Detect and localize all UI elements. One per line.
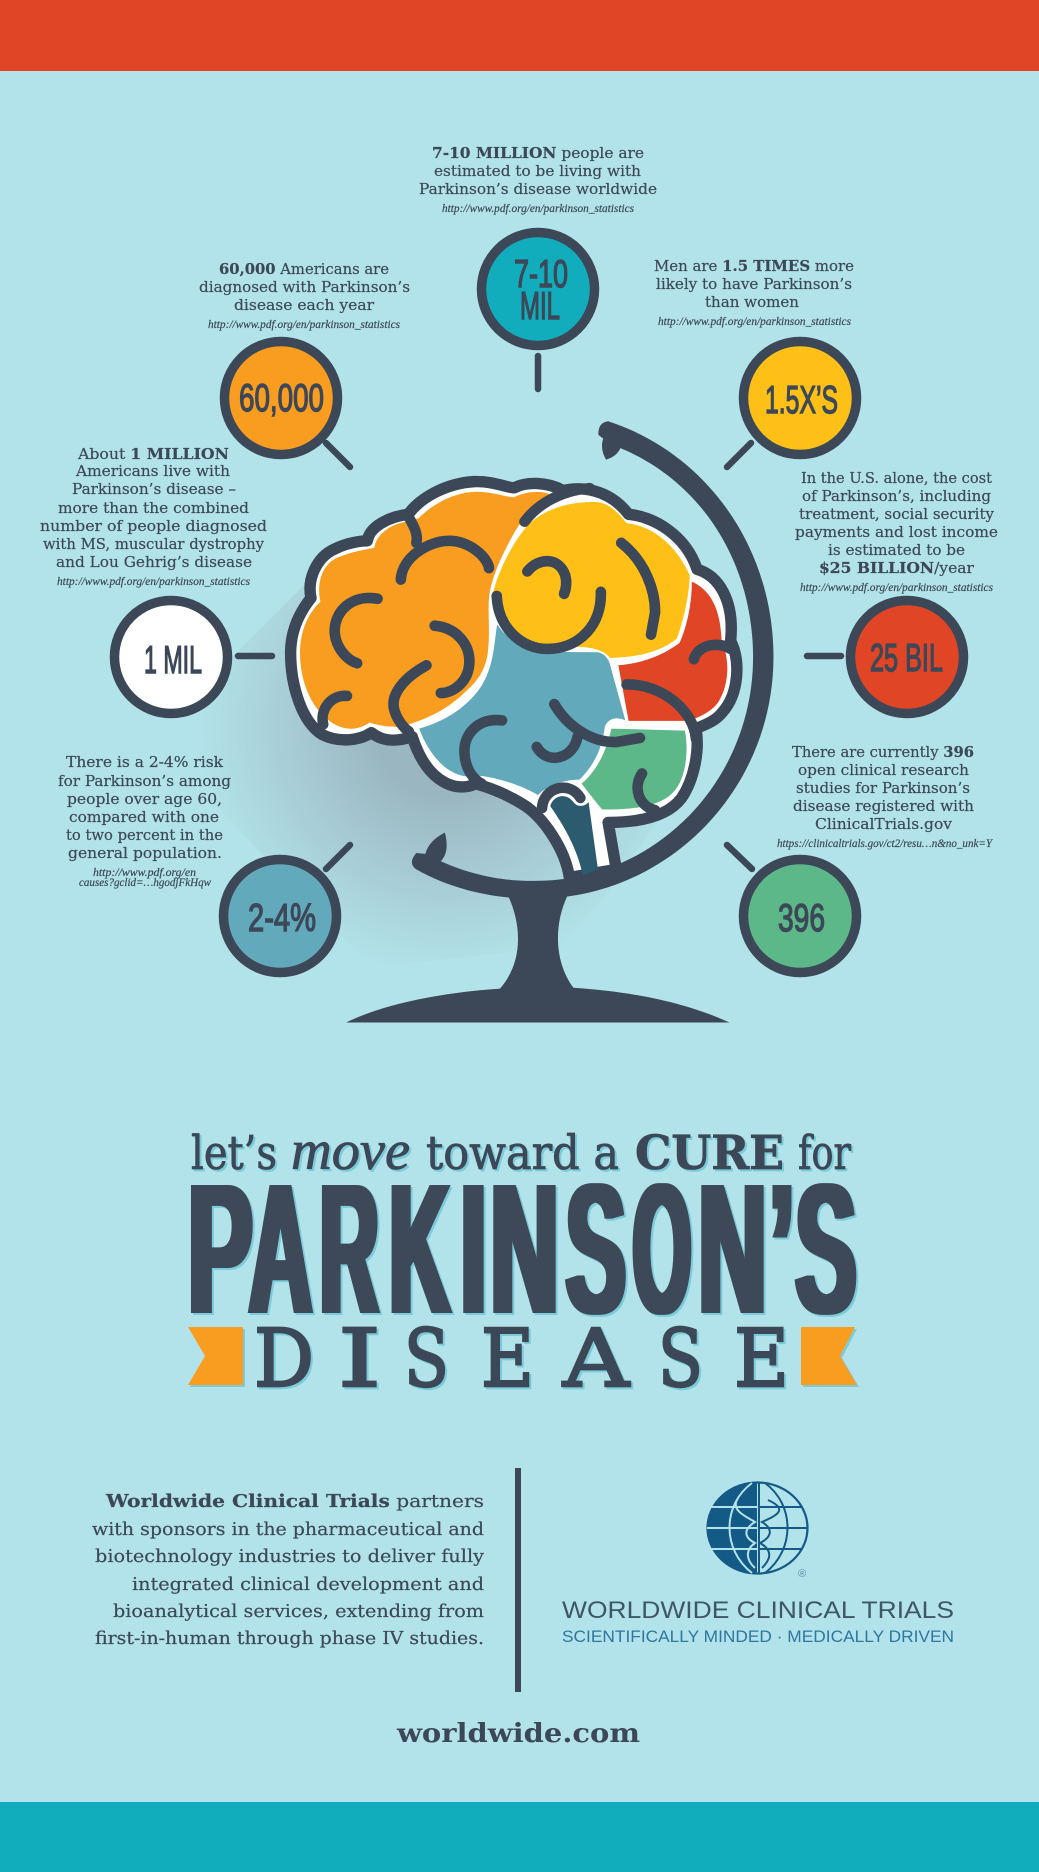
connector — [326, 443, 350, 467]
caption: http://www.pdf.org/en/parkinson_statistics — [800, 582, 994, 594]
caption: open clinical research — [798, 761, 969, 779]
brain lobe: cerebellum green — [582, 729, 687, 809]
caption: likely to have Parkinson’s — [656, 275, 852, 293]
top banner — [0, 0, 1039, 71]
caption: In the U.S. alone, the cost — [801, 469, 992, 487]
caption: Men are 1.5 TIMES more — [654, 257, 854, 275]
title word: Parkinson's: R — [320, 1146, 378, 1353]
company description — [92, 1491, 485, 1649]
stat: 25 billion — [795, 469, 998, 714]
title word: Parkinson's: N — [698, 1146, 766, 1353]
caption: causes?gclid=…hgodjFkHqw — [79, 877, 211, 889]
brain lobe: occipital red — [618, 582, 727, 721]
caption: About 1 MILLION — [77, 445, 229, 463]
caption — [40, 445, 267, 588]
title word: disease: E — [734, 1312, 789, 1405]
caption: 7-10 MILLION people are — [432, 144, 644, 162]
brain lobe: frontal orange — [300, 492, 552, 729]
badge — [744, 860, 856, 972]
brain outline — [291, 482, 737, 878]
caption: studies for Parkinson’s — [796, 779, 970, 797]
connector — [727, 845, 752, 869]
badge — [850, 600, 964, 714]
caption: payments and lost income — [795, 523, 998, 541]
caption: more than the combined — [58, 499, 249, 517]
badge: 2-4% — [248, 897, 316, 940]
text: S — [795, 1146, 856, 1353]
title word: Parkinson's — [188, 1146, 856, 1353]
caption: There are currently 396 — [792, 743, 974, 761]
long shadow — [151, 582, 661, 967]
stat: 2-4 percent — [58, 753, 350, 972]
caption: http://www.pdf.org/en/parkinson_statistics — [208, 319, 401, 331]
caption: of Parkinson’s, including — [802, 487, 991, 505]
badge: MIL — [520, 285, 560, 328]
badge: 25 BIL — [870, 637, 943, 680]
website: worldwide.com — [396, 1719, 640, 1749]
ribbon right — [801, 1327, 857, 1385]
registered mark: ® — [798, 1568, 806, 1580]
title word: Parkinson's: P — [188, 1146, 252, 1353]
badge: 1 MIL — [144, 639, 202, 682]
caption: treatment, social security — [799, 505, 995, 523]
brain lobe: temporal blue — [419, 624, 625, 795]
bottom banner — [0, 1802, 1039, 1872]
caption: and Lou Gehrig’s disease — [56, 553, 252, 571]
divider — [515, 1468, 521, 1692]
title word: disease: S — [658, 1312, 703, 1405]
badge — [114, 600, 228, 714]
title word: Parkinson's: I — [460, 1146, 486, 1353]
caption — [795, 469, 998, 594]
caption: than women — [705, 293, 799, 311]
company description: first-in-human through phase IV studies. — [95, 1628, 484, 1649]
caption: 60,000 Americans are — [219, 260, 389, 278]
caption — [654, 257, 854, 328]
caption: https://clinicaltrials.gov/ct2/resu…n&no_unk=Y — [777, 838, 994, 850]
brain stem — [550, 796, 598, 876]
brain folds — [323, 488, 731, 810]
caption: diagnosed with Parkinson’s — [199, 278, 410, 296]
stat: 1 million — [40, 445, 272, 714]
badge: 60,000 — [239, 377, 324, 420]
title word: Parkinson's: K — [390, 1146, 450, 1353]
connector — [807, 653, 841, 659]
title word: disease: E — [481, 1312, 534, 1405]
caption — [199, 260, 410, 331]
caption: Americans live with — [75, 462, 230, 480]
title line: let's move toward a cure for — [191, 1120, 851, 1182]
caption: ClinicalTrials.gov — [815, 815, 953, 833]
caption: for Parkinson’s among — [58, 772, 231, 790]
caption: http://www.pdf.org/en/parkinson_statistics — [658, 316, 852, 328]
stat: 7-10 million — [419, 144, 657, 389]
title word: disease: A — [562, 1312, 630, 1405]
title word: disease: I — [338, 1312, 381, 1405]
main title — [188, 1120, 857, 1405]
badge — [482, 232, 594, 346]
caption: with MS, muscular dystrophy — [43, 535, 265, 553]
caption: Parkinson’s disease worldwide — [419, 180, 657, 198]
company description: biotechnology industries to deliver fully — [95, 1546, 485, 1567]
logo tagline: SCIENTIFICALLY MINDED · MEDICALLY DRIVEN — [562, 1628, 954, 1646]
badge: 7-10 — [514, 253, 568, 296]
badge — [224, 342, 338, 454]
caption: http://www.pdf.org/en/parkinson_statistics — [57, 576, 251, 588]
logo: Worldwide Clinical Trials globe — [707, 1482, 808, 1574]
caption: http://www.pdf.org/en — [93, 867, 196, 879]
caption — [419, 144, 657, 215]
caption — [58, 753, 231, 889]
brain lobe: parietal yellow — [493, 502, 690, 658]
connector — [535, 356, 541, 389]
caption — [777, 743, 994, 850]
badge — [224, 860, 336, 972]
caption: people over age 60, — [67, 790, 222, 808]
title word: Parkinson's: O — [633, 1146, 691, 1353]
connector — [326, 845, 350, 869]
caption: There is a 2-4% risk — [66, 753, 224, 771]
caption: disease registered with — [793, 797, 974, 815]
title line: let's move toward a cure for: for — [798, 1126, 851, 1181]
caption: to two percent in the — [66, 826, 223, 844]
stat: 396 studies — [727, 743, 994, 972]
title word: Parkinson's: A — [249, 1146, 312, 1353]
title line: let's move toward a cure for: CURE — [635, 1126, 784, 1181]
logo wordmark: WORLDWIDE CLINICAL TRIALS — [562, 1597, 954, 1624]
title word: disease: S — [404, 1312, 449, 1405]
title line: let's move toward a cure for: let’s — [191, 1126, 277, 1181]
caption: Parkinson’s disease – — [72, 480, 236, 498]
globe stand base — [346, 896, 729, 1022]
title word: Parkinson's: S — [566, 1146, 626, 1353]
title word: Parkinson's: ’ — [770, 1146, 794, 1353]
stat: 1.5 times — [654, 257, 856, 467]
company description: with sponsors in the pharmaceutical and — [92, 1519, 484, 1540]
caption: disease each year — [234, 296, 375, 314]
caption: compared with one — [69, 808, 219, 826]
company description: Worldwide Clinical Trials partners — [105, 1491, 484, 1512]
badge: 396 — [778, 897, 825, 940]
connector — [727, 443, 751, 467]
caption: is estimated to be — [828, 541, 965, 559]
caption: estimated to be living with — [434, 162, 641, 180]
globe stand arm — [412, 421, 773, 899]
caption: http://www.pdf.org/en/parkinson_statistics — [442, 203, 635, 215]
ribbon left — [188, 1327, 243, 1385]
title line: let's move toward a cure for: toward a — [426, 1126, 619, 1181]
illustration: brain on globe stand — [151, 421, 773, 1022]
badge — [744, 342, 856, 454]
company description: integrated clinical development and — [132, 1574, 484, 1595]
caption: general population. — [68, 844, 222, 862]
caption: number of people diagnosed — [40, 517, 267, 535]
stat: 60,000 — [199, 260, 410, 467]
title word: disease: D — [254, 1312, 314, 1405]
caption: $25 BILLION /year — [819, 559, 975, 577]
company description: bioanalytical services, extending from — [113, 1601, 484, 1622]
title line: let's move toward a cure for: move — [291, 1120, 410, 1182]
title word: Parkinson's: N — [490, 1146, 558, 1353]
connector — [238, 653, 272, 659]
badge: 1.5X’S — [765, 379, 838, 422]
